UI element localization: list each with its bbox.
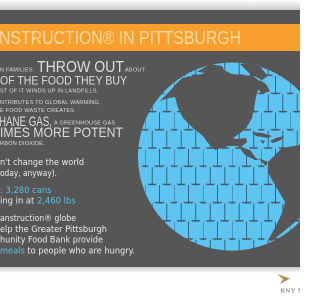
south america (268, 145, 300, 241)
donation text: hunity Food Bank provide (0, 234, 103, 244)
throw out line: THROW OUT (37, 59, 124, 76)
statement: n't change the world (0, 157, 84, 167)
central america link (258, 158, 268, 166)
north america (160, 69, 268, 160)
arctic islands (197, 62, 270, 94)
top shadow (0, 0, 300, 11)
methane line: A GREENHOUSE GAS (54, 120, 115, 126)
bottom shadow (0, 267, 300, 273)
globe (138, 62, 300, 250)
can statistics: ing in at 2,460 lbs (0, 196, 76, 206)
throw out line: ABOUT (125, 68, 146, 74)
methane line: HANE GAS, (0, 113, 52, 129)
globe cans (138, 62, 320, 250)
statement: oday, anyway). (0, 168, 57, 178)
donation text: anstruction® globe (0, 213, 76, 223)
more potent line: IMES MORE POTENT (0, 124, 123, 140)
continents (160, 62, 300, 241)
header band (0, 24, 300, 51)
can statistics (0, 185, 76, 206)
caribbean islands (252, 132, 284, 144)
logo (277, 274, 304, 294)
food waste line: E FOOD WASTE CREATES (0, 108, 74, 114)
statement (0, 157, 84, 178)
header title: NSTRUCTION® IN PITTSBURGH (0, 28, 241, 48)
donation text: elp the Greater Pittsburgh (0, 224, 107, 234)
throw out line (0, 59, 146, 76)
body copy: food waste facts (0, 59, 146, 147)
donation text: meals to people who are hungry. (0, 246, 135, 256)
donation text (0, 213, 135, 256)
throw out line: N FAMILIES (0, 68, 33, 74)
logo arrow (277, 274, 290, 284)
landfills line: ST OF IT WINDS UP IN LANDFILLS. (0, 88, 99, 94)
food they buy line: OF THE FOOD THEY BUY (0, 74, 127, 88)
can statistics: : 3,280 cans (0, 185, 52, 195)
global warming line: NTRIBUTES TO GLOBAL WARMING, (0, 100, 101, 106)
methane line (0, 113, 115, 129)
carbon dioxide line: RBON DIOXIDE. (0, 141, 45, 147)
